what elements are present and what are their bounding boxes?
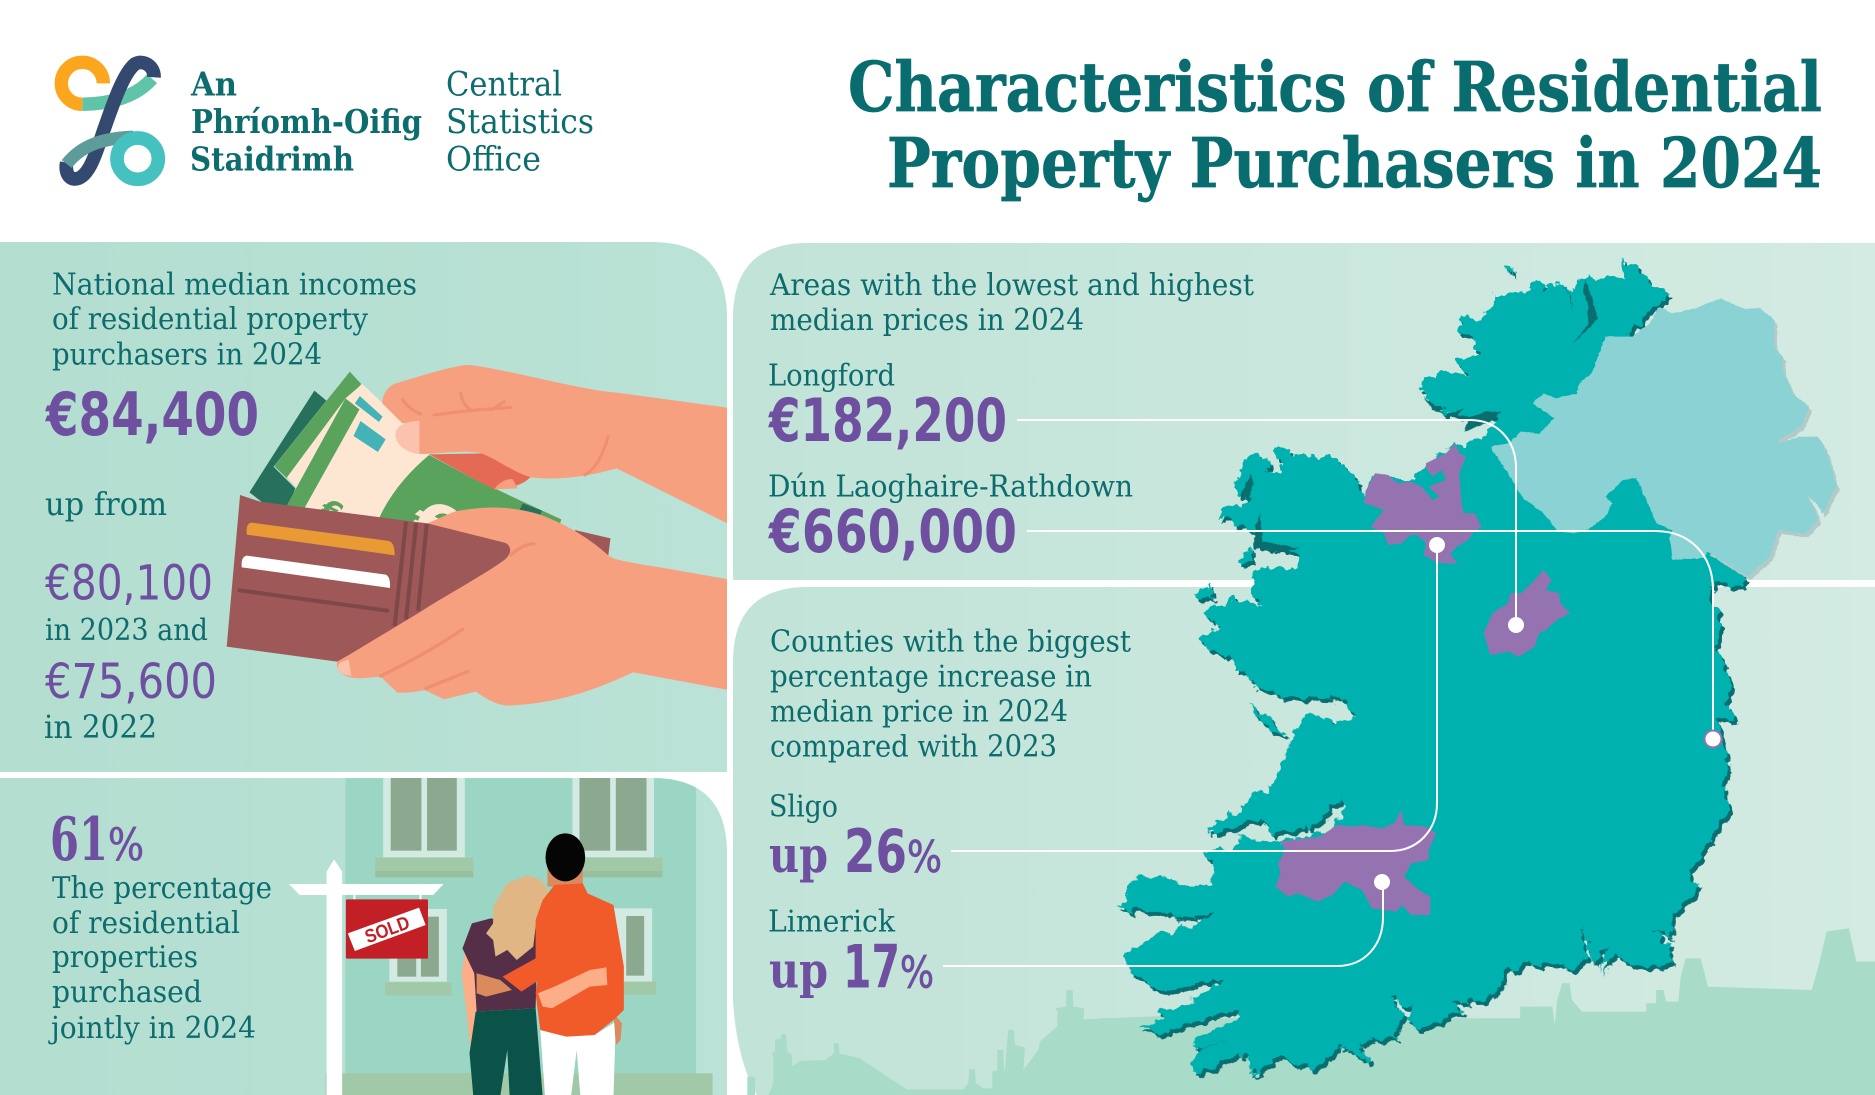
county: Longford bbox=[1484, 570, 1570, 657]
sold label: SOLD bbox=[362, 913, 413, 948]
figure: up 26%: % bbox=[907, 832, 942, 883]
text block: lowest and highest median prices bbox=[767, 268, 1254, 567]
heading: national median incomes: National median incomes bbox=[52, 268, 417, 302]
panel background bbox=[0, 242, 727, 772]
connector: Longford bbox=[1017, 420, 1524, 633]
heading: areas bbox=[769, 268, 1254, 338]
figure: up 17%: up bbox=[769, 940, 828, 1000]
illustration: hands holding wallet with banknotes bbox=[227, 365, 732, 706]
logo text: English name: Central bbox=[446, 64, 562, 104]
logo text: English name: Statistics bbox=[446, 102, 594, 142]
text: percentage purchased jointly: The percentage bbox=[52, 871, 272, 906]
heading: national median incomes: purchasers in 2024 bbox=[52, 338, 322, 372]
logo text: English name bbox=[446, 64, 594, 180]
heading: counties: median price in 2024 bbox=[770, 694, 1068, 730]
figure: 61%: % bbox=[108, 820, 144, 871]
logo mark bbox=[61, 62, 158, 179]
figure: 660,000: €660,000 bbox=[767, 497, 1017, 567]
logo text: English name: Office bbox=[446, 140, 541, 180]
skyline silhouette bbox=[747, 928, 1875, 1095]
figure: up 26% bbox=[769, 817, 942, 887]
figure: up 26%: up bbox=[769, 825, 828, 884]
connector: Limerick bbox=[943, 874, 1390, 966]
title bbox=[848, 48, 1822, 204]
heading: counties: percentage increase in bbox=[770, 660, 1092, 694]
panel background bbox=[0, 778, 727, 1095]
logo text: Irish name: An bbox=[190, 64, 237, 104]
figure: 61%: 61 bbox=[50, 805, 108, 875]
heading: national median incomes: of residential property bbox=[52, 302, 368, 337]
heading: counties: compared with 2023 bbox=[770, 730, 1057, 764]
connector: Sligo bbox=[951, 537, 1445, 851]
illustration: hands holding wallet with banknotes: € bbox=[313, 492, 348, 533]
panel: lowest and highest median prices background bbox=[733, 243, 1875, 580]
label: Sligo: Sligo bbox=[769, 790, 838, 824]
panel: jointly purchased properties bbox=[0, 777, 727, 1095]
land: Republic of Ireland bbox=[1117, 259, 1778, 1077]
county: Sligo bbox=[1364, 443, 1481, 564]
text: in 2023 and: in 2023 and bbox=[45, 613, 208, 648]
label: Dún Laoghaire-Rathdown: Dún Laoghaire-Rathdown bbox=[768, 470, 1133, 504]
illustration: couple in front of house with sold sign bbox=[289, 777, 713, 1095]
label: Limerick: Limerick bbox=[768, 904, 896, 940]
heading: national median incomes bbox=[52, 268, 417, 372]
heading: areas: Areas with the lowest and highest bbox=[769, 268, 1254, 303]
figure: 75,600: €75,600 bbox=[45, 654, 217, 710]
panel: biggest percentage increase background bbox=[733, 587, 1875, 1095]
county: Limerick bbox=[1275, 810, 1436, 915]
map of Ireland bbox=[1117, 259, 1839, 1081]
label: Longford: Longford bbox=[768, 358, 895, 394]
coastal inlet shading bbox=[1240, 280, 1598, 552]
heading: counties: Counties with the biggest bbox=[770, 624, 1131, 660]
figure: up 17%: 17 bbox=[843, 932, 900, 1002]
figure: up 17%: % bbox=[900, 948, 934, 998]
heading: counties bbox=[770, 624, 1131, 764]
Northern Ireland shadow bbox=[1697, 302, 1839, 581]
heading: areas: median prices in 2024 bbox=[770, 303, 1084, 338]
figure: 80,100: €80,100 bbox=[45, 556, 213, 612]
text: percentage purchased jointly: properties bbox=[52, 940, 198, 975]
figure: up 26%: 26 bbox=[844, 817, 907, 887]
Northern Ireland bbox=[1490, 298, 1836, 577]
text: percentage purchased jointly: purchased bbox=[52, 975, 202, 1010]
text: in 2022: in 2022 bbox=[44, 708, 157, 746]
text: percentage purchased jointly bbox=[48, 871, 272, 1046]
logo: Central Statistics Office bbox=[61, 62, 594, 180]
logo text: Irish name bbox=[190, 64, 422, 178]
logo text: Irish name: Phríomh-Oifig bbox=[191, 102, 422, 141]
text block: biggest percentage increase bbox=[768, 624, 1131, 1002]
figure: 84,400: €84,400 bbox=[44, 380, 259, 450]
land shadow bbox=[1120, 263, 1781, 1081]
text: up from: up from bbox=[45, 485, 167, 523]
text: percentage purchased jointly: jointly in 2024 bbox=[48, 1011, 256, 1046]
figure: up 17% bbox=[769, 932, 934, 1002]
text: percentage purchased jointly: of residential bbox=[52, 906, 240, 941]
panel: national median incomes bbox=[0, 242, 732, 772]
connector: Dún Laoghaire-Rathdown bbox=[1027, 531, 1722, 748]
logo text: Irish name: Staidrimh bbox=[190, 140, 354, 178]
figure: 182,200: €182,200 bbox=[767, 386, 1007, 456]
illustration: hands holding wallet with banknotes: € bbox=[397, 484, 470, 570]
